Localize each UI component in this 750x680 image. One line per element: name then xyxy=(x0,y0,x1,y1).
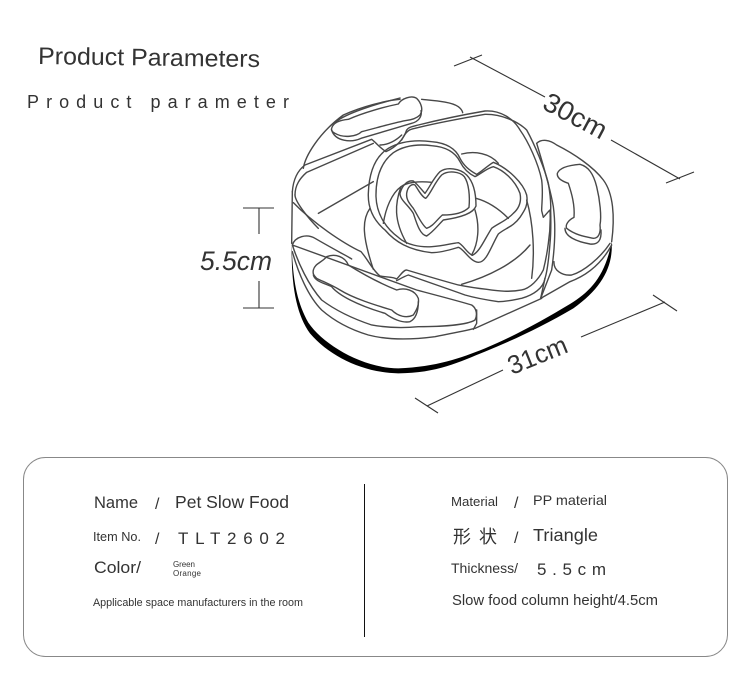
spec: shape: Triangle xyxy=(533,525,598,545)
spec: color xyxy=(94,558,202,578)
inner bowl maze xyxy=(368,141,533,284)
spec: material: Material xyxy=(451,494,498,509)
base thick edge xyxy=(292,242,612,373)
subtitle: Product parameter xyxy=(27,92,289,112)
spec: item number: / xyxy=(155,531,160,548)
right bone compartment xyxy=(537,140,613,298)
tray rim band xyxy=(292,111,551,328)
spec: column height: Slow food column height/4.5cm xyxy=(452,593,658,609)
title: Product Parameters xyxy=(38,43,260,73)
product line drawing: slow feeder bowl xyxy=(292,97,613,373)
panel: product specifications xyxy=(24,458,728,656)
left body and tray front lines xyxy=(292,182,397,279)
spec: name: Name xyxy=(94,494,138,512)
spec: shape: 形状 xyxy=(453,527,497,547)
spec: name: Pet Slow Food xyxy=(175,492,289,512)
dimension: 30cm xyxy=(454,55,694,183)
spec: shape: / xyxy=(514,530,519,547)
spec: color: Green xyxy=(173,560,195,569)
spec: applicable space: Applicable space manufacturers in the room xyxy=(93,597,303,609)
spec: thickness xyxy=(451,560,606,579)
spec: material: / xyxy=(514,495,519,512)
spec: material xyxy=(451,492,607,512)
spec: name: / xyxy=(155,496,160,513)
spec: material: PP material xyxy=(533,492,607,508)
spec: shape xyxy=(453,525,598,547)
centre column xyxy=(400,169,476,236)
spec: thickness: 5.5cm xyxy=(537,560,606,579)
spec: item number: TLT2602 xyxy=(178,529,285,548)
dimension: 31cm xyxy=(415,295,677,413)
dimension: 5.5cm: 5.5cm xyxy=(200,246,272,276)
rear bone compartment xyxy=(303,97,463,168)
spec: item number xyxy=(93,529,285,548)
spec: name xyxy=(94,492,289,513)
front bone compartment xyxy=(292,236,477,339)
spec: color: Color/ xyxy=(94,558,141,577)
spec: item number: Item No. xyxy=(93,530,141,544)
dimension: 5.5cm xyxy=(200,208,274,308)
dimension: 31cm: 31cm xyxy=(503,330,572,381)
spec: color: Orange xyxy=(173,569,202,578)
spec: thickness: Thickness/ xyxy=(451,561,518,576)
dimension: 30cm: 30cm xyxy=(538,87,612,145)
